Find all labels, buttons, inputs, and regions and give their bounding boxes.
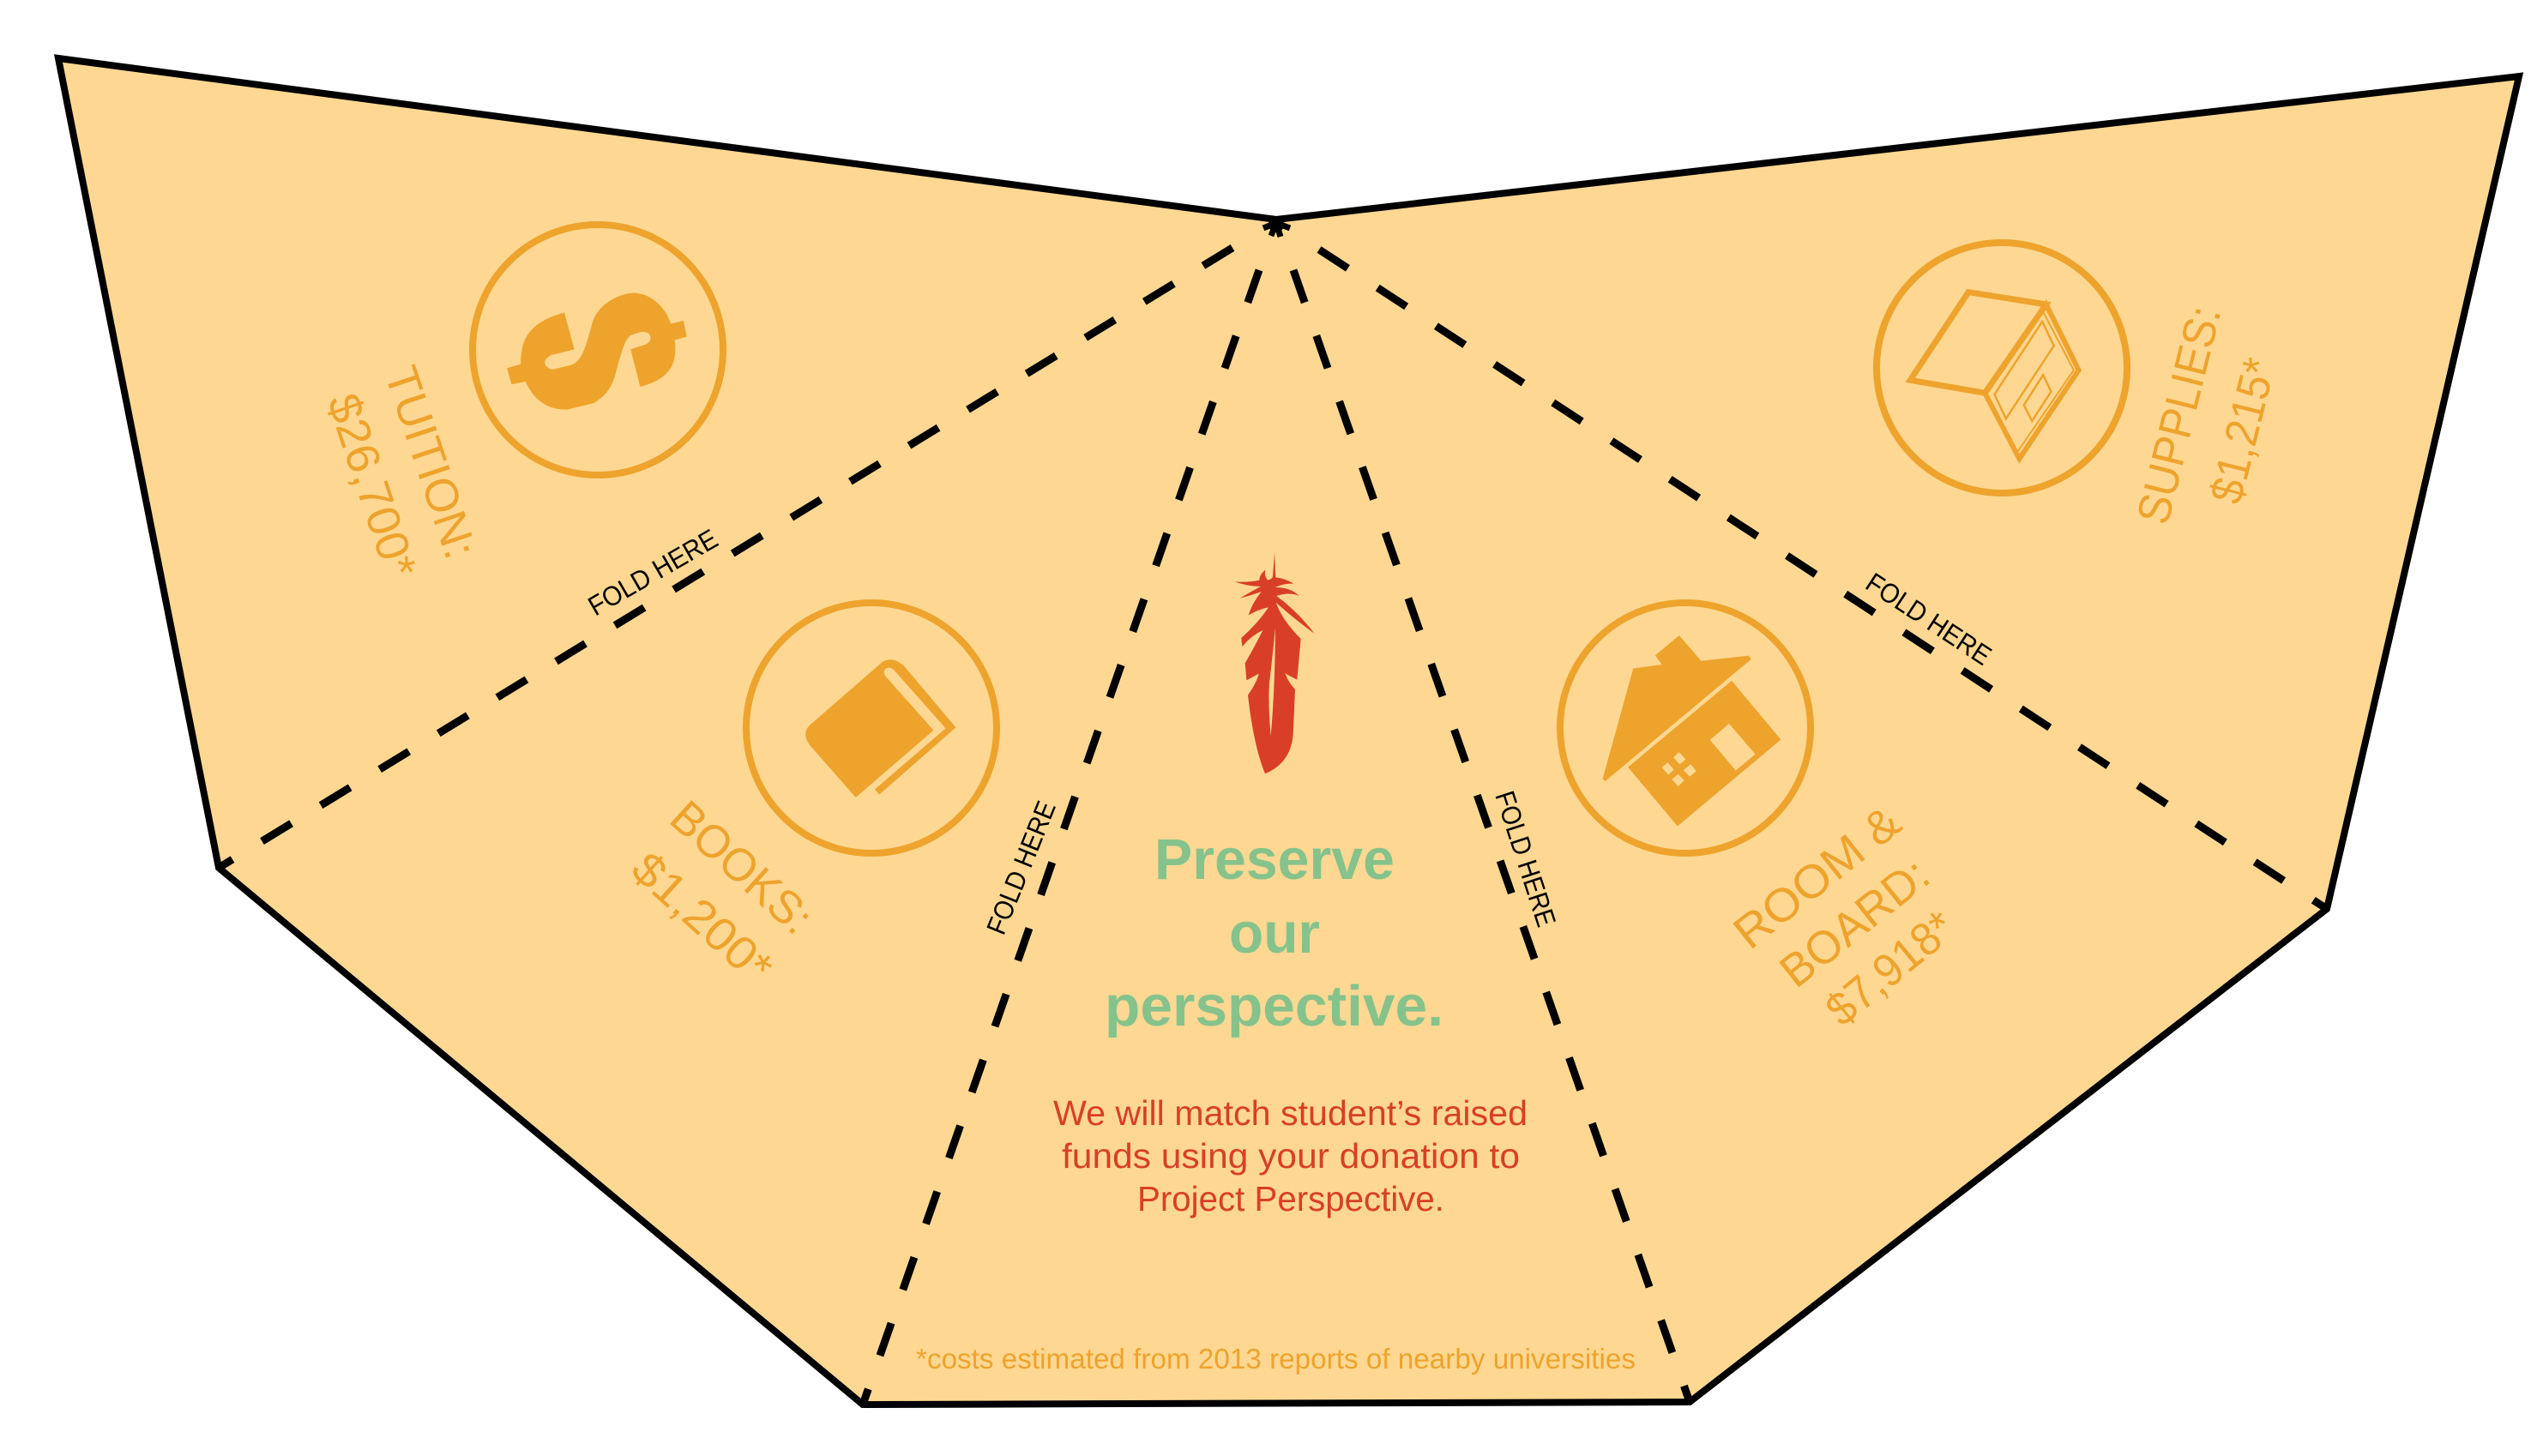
footnote: *costs estimated from 2013 reports of nearby universities: [916, 1343, 1636, 1375]
icon: house in circle: [1560, 603, 1811, 853]
dashed fold lines: [219, 248, 2327, 1405]
label: tuition: [317, 360, 486, 584]
label: supplies: SUPPLIES:: [2127, 301, 2231, 529]
icon: red feather: [1234, 553, 1315, 773]
label: tuition: $26,700*: [317, 388, 426, 584]
heading: our: [1229, 901, 1320, 966]
label: supplies: [2127, 301, 2286, 529]
icon: tuition dollar in circle: [473, 225, 723, 475]
label: books: BOOKS:: [660, 791, 823, 944]
icon: book in circle: [746, 603, 997, 853]
label: books: [622, 791, 823, 994]
label: room and board: [1724, 796, 1965, 1036]
label: room and board: ROOM &: [1724, 796, 1910, 959]
fold label: centre right: FOLD HERE: [1489, 787, 1562, 930]
fold label: upper right: FOLD HERE: [1860, 567, 1997, 671]
fold point asterisk: [1263, 217, 1290, 237]
label: books: $1,200*: [622, 842, 782, 994]
fold label: upper left: FOLD HERE: [583, 523, 723, 622]
body text: [1053, 1093, 1528, 1218]
label: room and board: BOARD:: [1770, 848, 1939, 997]
heading: perspective.: [1105, 974, 1443, 1038]
body text: Project Perspective.: [1137, 1179, 1444, 1218]
fold label: centre left: FOLD HERE: [980, 797, 1062, 939]
heading: Preserve: [1154, 827, 1395, 892]
body text: funds using your donation to: [1062, 1136, 1520, 1176]
body text: We will match student’s raised: [1053, 1093, 1528, 1133]
label: room and board: $7,918*: [1816, 901, 1965, 1036]
label: tuition: TUITION:: [375, 360, 486, 565]
icon: laptop in circle: [1877, 243, 2127, 493]
label: supplies: $1,215*: [2200, 352, 2286, 508]
heading: [1105, 827, 1443, 1038]
